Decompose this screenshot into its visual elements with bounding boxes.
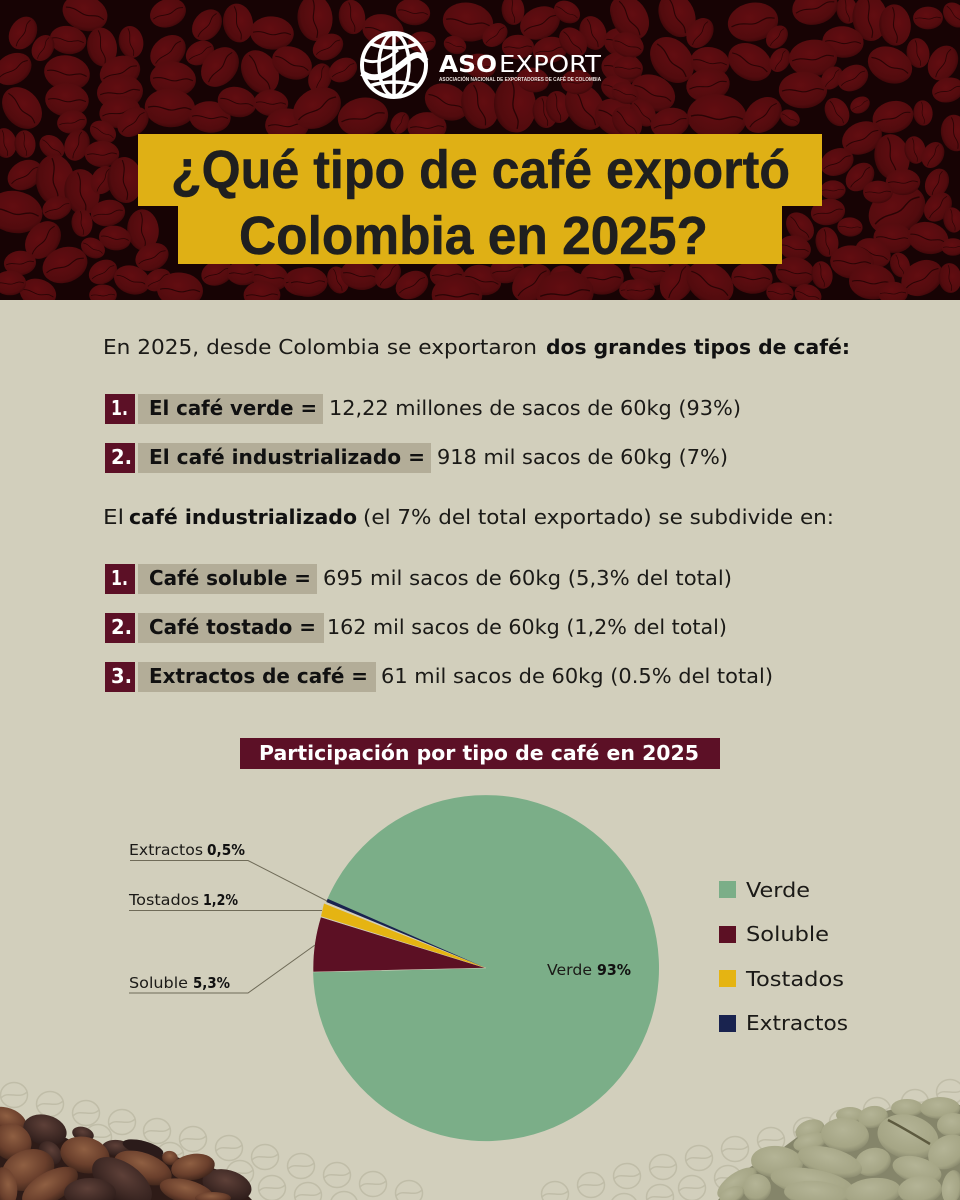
callout: Tostados 1,2% xyxy=(128,891,322,910)
list item: extractos de café xyxy=(105,662,773,692)
list item: café verde xyxy=(105,394,741,424)
legend item: Soluble xyxy=(719,922,829,946)
slice: Verde 93% xyxy=(313,795,659,1141)
callout: Extractos 0,5% xyxy=(129,841,327,901)
legend item: Soluble: Soluble xyxy=(746,922,829,946)
list item: café industrializado: 2. xyxy=(111,445,132,469)
callout: Extractos 0,5%: Extractos xyxy=(129,841,203,859)
wordmark: ASO xyxy=(439,52,497,78)
legend item: Tostados: Tostados xyxy=(745,967,844,991)
subdivision text: El xyxy=(103,505,124,529)
legend item: Verde: Verde xyxy=(746,878,810,902)
intro text: En 2025, desde Colombia se exportaron xyxy=(103,335,537,359)
slice: Tostados 1,2% xyxy=(321,904,486,968)
list item: café tostado: Café tostado = xyxy=(149,615,316,639)
photo: roasted coffee beans xyxy=(0,1102,255,1200)
header: red coffee beans photo band xyxy=(0,0,960,317)
logo: Asoexport xyxy=(362,33,602,97)
subdivision text xyxy=(103,505,834,529)
title banner xyxy=(138,134,822,266)
list item: extractos de café: Extractos de café = xyxy=(149,664,368,688)
legend item: Extractos: Extractos xyxy=(746,1011,848,1035)
label: Verde 93%: Verde xyxy=(547,961,592,979)
label: Verde 93%: 93% xyxy=(597,961,631,979)
subdivision text: café industrializado xyxy=(129,505,357,529)
list item: café soluble: 695 mil sacos de 60kg (5,3% del total) xyxy=(323,566,732,590)
list item: café industrializado: El café industrializado = xyxy=(149,445,425,469)
slice: Soluble 5,3% xyxy=(313,917,486,972)
subdivision text: (el 7% del total exportado) se subdivide en: xyxy=(363,505,834,529)
callout: Tostados 1,2%: 1,2% xyxy=(203,891,238,909)
pie chart xyxy=(313,795,659,1141)
title banner: Colombia en 2025? xyxy=(239,206,708,266)
legend item: Verde xyxy=(719,878,810,902)
decorative rings xyxy=(0,1080,960,1200)
logo: Asoexport: EXPORT xyxy=(499,52,602,78)
list item: extractos de café: 3. xyxy=(111,664,132,688)
list item: café soluble xyxy=(105,564,732,594)
legend xyxy=(719,878,848,1035)
callout: Soluble 5,3% xyxy=(129,945,315,993)
label: Verde 93% xyxy=(547,961,631,979)
intro text xyxy=(103,335,850,359)
chart heading: Participación por tipo de café en 2025 xyxy=(259,741,699,765)
slice: Extractos 0,5% xyxy=(326,899,486,968)
list item: café verde: El café verde = xyxy=(149,396,317,420)
list item: extractos de café: 61 mil sacos de 60kg (0.5% del total) xyxy=(381,664,773,688)
list item: café verde: 12,22 millones de sacos de 60kg (93%) xyxy=(329,396,741,420)
callout: Tostados 1,2%: Tostados xyxy=(128,891,199,909)
list item: café industrializado: 918 mil sacos de 60kg (7%) xyxy=(437,445,728,469)
list item: café industrializado xyxy=(105,443,728,473)
callout: Extractos 0,5%: 0,5% xyxy=(207,841,245,859)
logo: Asoexport: ASOCIACIÓN NACIONAL DE EXPORTADORES DE CAFÉ DE COLOMBIA xyxy=(439,75,601,83)
list item: café tostado: 162 mil sacos de 60kg (1,2% del total) xyxy=(327,615,727,639)
chart heading xyxy=(240,738,720,769)
list item: café soluble: Café soluble = xyxy=(149,566,311,590)
callout: Soluble 5,3%: 5,3% xyxy=(193,974,230,992)
intro text: dos grandes tipos de café: xyxy=(546,335,850,359)
list item: café verde: 1. xyxy=(111,396,128,420)
title banner: ¿Qué tipo de café exportó xyxy=(171,140,790,200)
list item: café tostado: 2. xyxy=(111,615,132,639)
icon: globe xyxy=(362,33,426,97)
callout: Soluble 5,3%: Soluble xyxy=(129,974,188,992)
list item: café tostado xyxy=(105,613,727,643)
photo: green coffee beans xyxy=(712,1097,960,1200)
list item: café soluble: 1. xyxy=(111,566,128,590)
